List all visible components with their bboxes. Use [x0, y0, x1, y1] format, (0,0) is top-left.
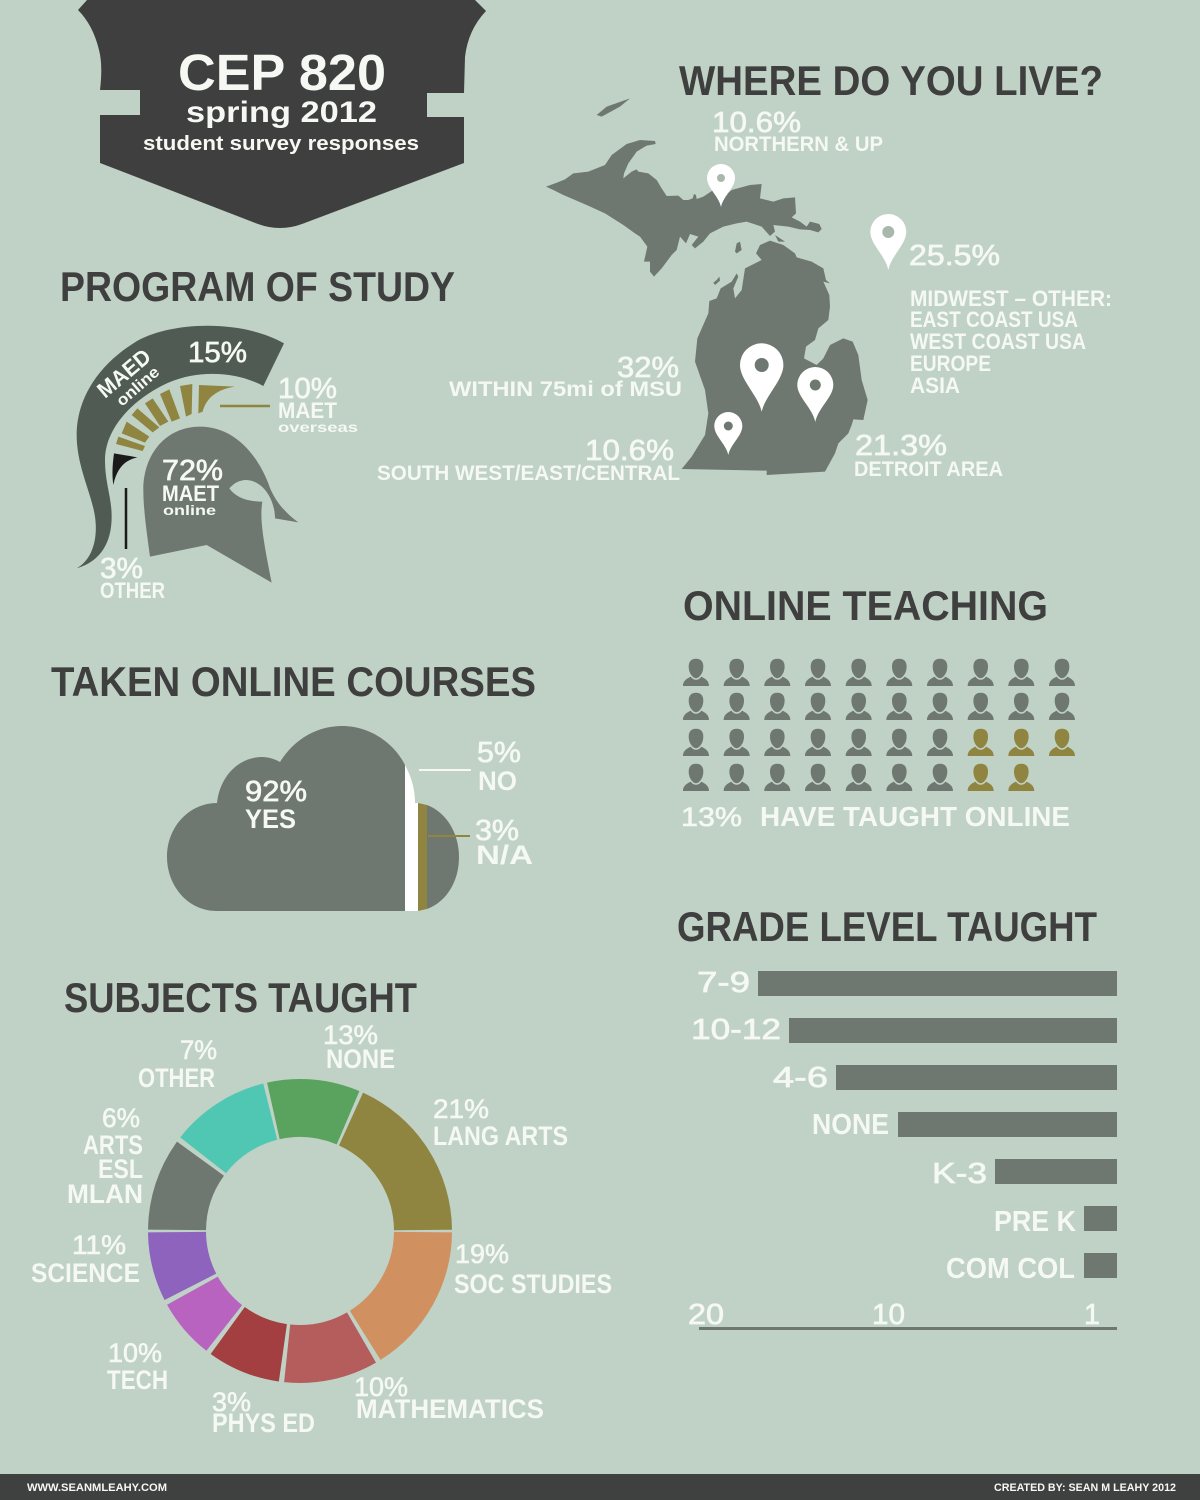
- label: language arts: [433, 1094, 568, 1151]
- label: arts esl mlan: ESL: [98, 1154, 143, 1184]
- label: south west east central: SOUTH WEST/EAST/CENTRAL: [377, 462, 680, 485]
- label: n/a: N/A: [476, 840, 533, 870]
- label: science: 11%: [72, 1230, 126, 1260]
- label: arts esl mlan: 6%: [102, 1103, 140, 1133]
- axis: 20: [688, 1299, 724, 1331]
- label: none: 13%: [323, 1020, 378, 1050]
- label: tech: TECH: [107, 1365, 168, 1395]
- label: MAET overseas: 10%: [278, 373, 337, 405]
- heading: grade level taught: GRADE LEVEL TAUGHT: [677, 903, 1097, 950]
- label: detroit area: [854, 430, 1003, 481]
- label: physical education: 3%: [212, 1387, 251, 1417]
- axis: 1: [1084, 1299, 1100, 1331]
- heading: program of study: PROGRAM OF STUDY: [60, 263, 455, 310]
- label: within 75mi of MSU: WITHIN 75mi of MSU: [449, 378, 682, 401]
- label: yes: 92%: [245, 776, 307, 808]
- label: MAET overseas: MAET: [278, 398, 338, 423]
- footer: WWW.SEANMLEAHY.COM: [27, 1482, 167, 1494]
- label: language arts: LANG ARTS: [433, 1121, 568, 1151]
- cloud segment: yes: [167, 726, 405, 911]
- people icons: have not taught online: [683, 658, 1075, 791]
- leader line: no: [419, 769, 471, 771]
- bar: pre K: PRE K: [994, 1206, 1076, 1238]
- label: MAET online: online: [163, 502, 216, 518]
- subtitle: spring 2012: [186, 96, 377, 129]
- bar: none: NONE: [812, 1109, 889, 1141]
- label: mathematics: MATHEMATICS: [356, 1394, 544, 1424]
- label: none: NONE: [326, 1044, 395, 1074]
- tagline: student survey responses: [143, 133, 419, 155]
- leader line: n/a: [428, 835, 470, 837]
- label: social studies: [454, 1239, 612, 1299]
- label: detroit area: 21.3%: [855, 430, 947, 462]
- bar: 4-6: 4-6: [773, 1062, 828, 1094]
- bar: 10-12: [691, 1014, 1117, 1046]
- label: other: OTHER: [138, 1063, 215, 1093]
- crest feathers: MAET overseas: [116, 384, 235, 451]
- heading: taken online courses: TAKEN ONLINE COURSES: [51, 658, 536, 705]
- heading: subjects taught: SUBJECTS TAUGHT: [64, 974, 417, 1021]
- panel: grade level bar chart: [688, 967, 1117, 1331]
- pin: detroit area: [797, 367, 833, 422]
- bar: 4-6: [773, 1062, 1117, 1094]
- label: other: 7%: [180, 1035, 217, 1065]
- label: no: [477, 737, 521, 796]
- map of michigan: [546, 98, 868, 475]
- helmet graphic: [77, 326, 298, 583]
- label: physical education: [212, 1387, 315, 1438]
- axis: 10: [872, 1299, 905, 1331]
- label: midwest other: WEST COAST USA: [910, 329, 1086, 354]
- panel: header badge: [78, 0, 486, 228]
- label: social studies: SOC STUDIES: [454, 1269, 612, 1299]
- bar: K-3: [932, 1158, 1117, 1190]
- label: other: [100, 553, 165, 603]
- label: midwest other: EUROPE: [910, 351, 991, 376]
- label: within 75mi of MSU: 32%: [617, 352, 679, 384]
- label: n/a: [475, 815, 533, 870]
- label: tech: 10%: [108, 1338, 162, 1368]
- bar: 7-9: 7-9: [697, 967, 750, 999]
- label: midwest other: EAST COAST USA: [910, 307, 1078, 332]
- label: south west east central: [377, 435, 680, 485]
- label: midwest other: 25.5%: [909, 240, 1000, 272]
- panel: cloud chart: [167, 726, 533, 911]
- leader line: overseas: [220, 405, 270, 407]
- label: yes: [245, 776, 307, 834]
- donut chart: [127, 1058, 473, 1404]
- label: northern and UP: 10.6%: [712, 107, 801, 139]
- label: other: OTHER: [100, 578, 165, 603]
- label: physical education: PHYS ED: [212, 1408, 315, 1438]
- label: other: 3%: [100, 553, 143, 585]
- label: MAET overseas: overseas: [278, 419, 358, 435]
- bar: 10-12: 10-12: [691, 1014, 781, 1046]
- bar: K-3: K-3: [932, 1158, 987, 1190]
- helmet crest: MAED online: [77, 326, 284, 568]
- caption: have taught online: 13%: [681, 802, 742, 832]
- label: midwest other: ASIA: [910, 373, 960, 398]
- cloud segment: no: [405, 765, 418, 911]
- heading: where do you live: WHERE DO YOU LIVE?: [679, 57, 1103, 104]
- badge shape: [78, 0, 486, 228]
- label: social studies: 19%: [455, 1239, 509, 1269]
- label: n/a: 3%: [475, 815, 519, 847]
- label: MAED online: MAED: [92, 344, 156, 403]
- cloud segment: n/a: [418, 803, 427, 911]
- label: arts esl mlan: [67, 1103, 143, 1209]
- pin: south west: [714, 412, 742, 455]
- people icons: have taught online: [968, 728, 1075, 791]
- bar: community college: COM COL: [946, 1253, 1075, 1285]
- crest segment: other: [112, 453, 137, 485]
- axis: [688, 1299, 1117, 1331]
- label: tech: [107, 1338, 168, 1395]
- label: science: [31, 1230, 140, 1288]
- pin: within 75mi of MSU: [740, 343, 783, 412]
- label: no: NO: [478, 766, 517, 796]
- label: midwest other: MIDWEST – OTHER:: [910, 286, 1112, 311]
- pin: northern and UP: [707, 164, 735, 207]
- label: none: [323, 1020, 395, 1074]
- label: science: SCIENCE: [31, 1258, 140, 1288]
- label: northern and UP: NORTHERN & UP: [714, 133, 883, 156]
- label: language arts: 21%: [433, 1094, 489, 1124]
- label: MAED online: 15%: [188, 337, 247, 369]
- caption: have taught online: HAVE TAUGHT ONLINE: [760, 801, 1070, 832]
- heading: online teaching: ONLINE TEACHING: [683, 582, 1048, 629]
- bar: 7-9: [697, 967, 1117, 999]
- panel: spartan helmet chart: [77, 326, 358, 603]
- label: arts esl mlan: MLAN: [67, 1179, 143, 1209]
- helmet body: MAET online: [143, 427, 298, 583]
- label: MAET online: [162, 455, 223, 518]
- label: MAET online: 72%: [162, 455, 223, 487]
- label: MAET online: MAET: [162, 481, 220, 506]
- label: south west east central: 10.6%: [585, 435, 674, 467]
- label: within 75mi of MSU: [449, 352, 682, 401]
- title: CEP 820: [178, 44, 386, 101]
- panel: online teaching pictogram: [681, 658, 1075, 832]
- label: mathematics: [354, 1372, 544, 1424]
- label: arts esl mlan: ARTS: [83, 1130, 143, 1160]
- footer: CREATED BY: SEAN M LEAHY 2012: [994, 1482, 1176, 1494]
- bar: none: [812, 1109, 1117, 1141]
- label: MAED online: online: [113, 364, 163, 410]
- label: MAED online: [92, 337, 247, 410]
- leader line: other: [125, 488, 127, 549]
- panel: subjects donut chart: [31, 1020, 612, 1438]
- footer: [0, 1474, 1200, 1500]
- label: other: [138, 1035, 217, 1093]
- label: detroit area: DETROIT AREA: [854, 458, 1003, 481]
- label: yes: YES: [245, 804, 296, 834]
- label: northern and UP: [712, 107, 883, 156]
- pin: midwest other: [870, 214, 906, 270]
- label: MAET overseas: [278, 373, 358, 435]
- label: no: 5%: [477, 737, 521, 769]
- label: mathematics: 10%: [354, 1372, 408, 1402]
- panel: michigan map: [377, 98, 1112, 485]
- label: midwest other: [909, 240, 1112, 398]
- cloud segment: right lobe: [427, 805, 459, 909]
